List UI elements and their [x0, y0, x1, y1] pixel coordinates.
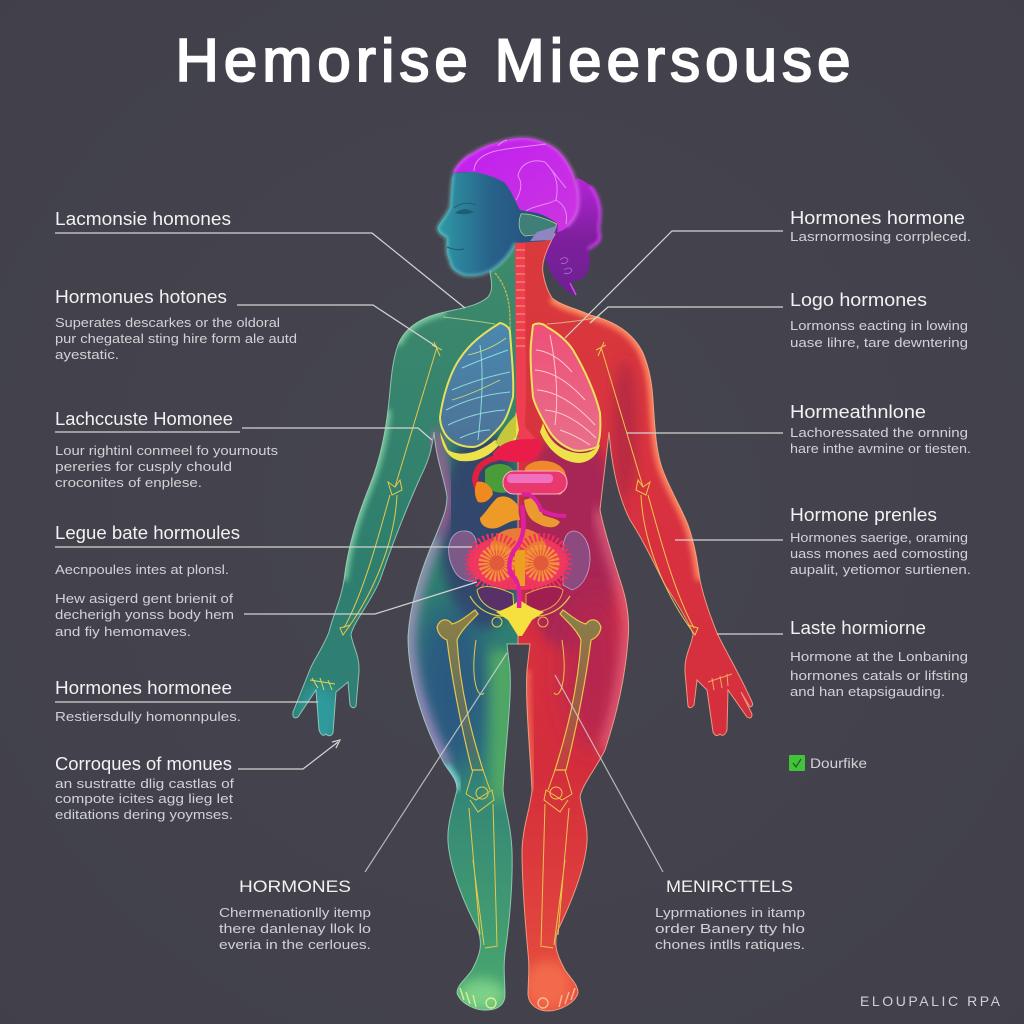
right callout 1 — [790, 208, 971, 244]
left callout 4: Hew asigerd gent brienit of — [55, 591, 233, 606]
right callout 3 — [790, 402, 971, 456]
liver — [525, 461, 567, 495]
left callout 3: Lour rightinl conmeel fo yournouts — [55, 443, 279, 458]
left callout 2: ayestatic. — [55, 347, 119, 362]
right callout 4 — [790, 505, 971, 577]
left callout 5: Restiersdully homonnpules. — [55, 709, 241, 724]
digestive organs — [475, 439, 567, 529]
legend: green check — [789, 755, 867, 771]
right callout 2: Lormonss eacting in lowing — [790, 318, 968, 333]
reproductive flower cluster — [468, 528, 568, 590]
bottom callout left — [219, 877, 371, 952]
left callout 2 — [55, 287, 297, 362]
bottom callout right — [655, 877, 805, 952]
left callout 3 — [55, 409, 279, 490]
right callout 2: uase lihre, tare dewntering — [790, 335, 968, 350]
left callout 4 — [55, 523, 240, 639]
pelvis — [470, 587, 570, 636]
left callout 6: an sustratte dlig castlas of — [55, 776, 234, 791]
colon tube — [475, 458, 497, 490]
right callout 5: and han etapsigauding. — [790, 684, 945, 699]
right half of body: red — [518, 234, 753, 1011]
digestive tract: S-curve — [509, 505, 524, 608]
bottom callout left: Chermenationlly itemp — [219, 905, 371, 920]
left lung — [440, 323, 513, 447]
right callout 4: Hormone prenles — [790, 505, 937, 525]
right lung — [531, 324, 600, 451]
left callout 5: Hormones hormonee — [55, 678, 232, 698]
right callout 4: uass mones aed comosting — [790, 546, 968, 561]
stomach — [493, 439, 541, 462]
skeleton left: femur, tibia and arm nerves — [340, 342, 498, 948]
right callout 4: aupalit, yetiomor surtienen. — [790, 562, 971, 577]
bottom callout right: MENIRCTTELS — [666, 877, 793, 896]
left callout 2: Superates descarkes or the oldoral — [55, 315, 280, 330]
right callout 5: Laste hormiorne — [790, 618, 926, 638]
lower organs — [480, 496, 520, 529]
bottom callout right: Lyprmationes in itamp — [655, 905, 805, 920]
right callout 1: Lasrnormosing corrpleced. — [790, 229, 971, 244]
left callout 2: pur chegateal sting hire form ale autd — [55, 331, 297, 346]
left callout 4: decherigh yonss body hem — [55, 607, 234, 622]
collarbones — [443, 317, 600, 324]
skeleton right: mirrored — [540, 342, 698, 948]
left callout 4: Legue bate hormoules — [55, 523, 240, 543]
left callout 1: Lacmonsie homones — [55, 209, 231, 229]
left callout 3: Lachccuste Homonee — [55, 409, 233, 429]
figure: human body anatomy — [293, 138, 753, 1011]
bottom callout left: there danlenay llok lo — [219, 921, 371, 936]
left callout 3: croconites of enplese. — [55, 475, 202, 490]
right callout 5 — [790, 618, 968, 699]
title: Hemorise Mieersouse — [176, 27, 850, 94]
orange clump — [475, 482, 493, 503]
head: teal face — [438, 170, 558, 276]
right callout 5: Hormone at the Lonbaning — [790, 649, 968, 664]
diaphragm: yellow bands — [440, 412, 600, 463]
left callout 6: compote icites agg lieg let — [55, 791, 233, 806]
right callout 2 — [790, 290, 968, 350]
right callout 3: Hormeathnlone — [790, 402, 926, 422]
right callout 4: Hormones saerige, oraming — [790, 530, 968, 545]
left callout 6 — [55, 754, 234, 822]
right callout 3: Lachoressated the ornning — [790, 425, 968, 440]
wrist and toe details — [310, 674, 732, 1008]
bottom callout right: order Banery tty hlo — [655, 921, 805, 936]
left callout 4: and fiy hemomaves. — [55, 624, 191, 639]
right callout 5: hormones catals or lifsting — [790, 668, 968, 683]
right callout 3: hare inthe avmine or tiesten. — [790, 441, 971, 456]
spine — [495, 243, 535, 445]
left callout 6: editations dering yoymses. — [55, 807, 233, 822]
leader lines — [55, 231, 783, 872]
left callout 3: pereries for cusply chould — [55, 459, 232, 474]
second head: purple profile — [544, 178, 600, 295]
ovaries: mauve lobes — [449, 531, 590, 590]
left callout 6: Corroques of monues — [55, 754, 232, 774]
bottom callout left: everia in the cerloues. — [219, 937, 371, 952]
footer logo text: ELOUPALIC RPA — [860, 993, 1001, 1009]
right callout 1: Hormones hormone — [790, 208, 965, 228]
left callout 2: Hormonues hotones — [55, 287, 227, 307]
left half of body: teal and green — [293, 236, 524, 1011]
right callout 2: Logo hormones — [790, 290, 927, 310]
legend: green check: Dourfike — [810, 755, 867, 771]
bottom callout left: HORMONES — [239, 877, 351, 896]
green gland — [485, 464, 513, 493]
left callout 5 — [55, 678, 241, 724]
left callout 4: Aecnpoules intes at plonsl. — [55, 562, 229, 577]
pink capsule — [503, 471, 567, 494]
bottom callout right: chones intlls ratiques. — [655, 937, 805, 952]
brain: magenta cap — [453, 138, 579, 232]
